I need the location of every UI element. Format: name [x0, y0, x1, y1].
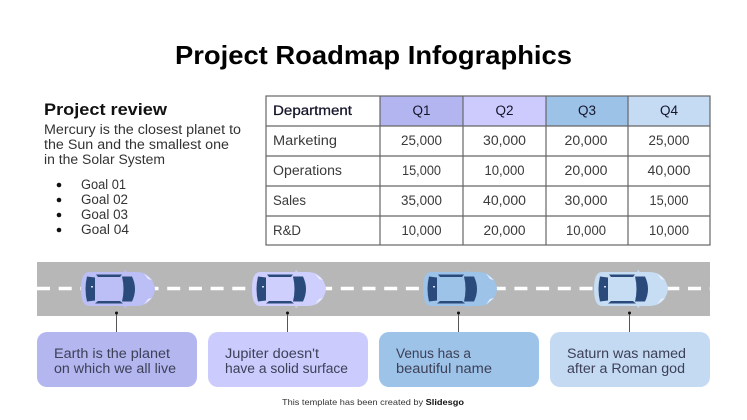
table: departments by quarter: 10,000	[566, 223, 606, 238]
table: departments by quarter: Operations	[273, 163, 342, 178]
table: departments by quarter: 25,000	[648, 133, 690, 148]
table: departments by quarter: 15,000	[402, 163, 441, 178]
card: Venus	[379, 332, 539, 387]
list: goals: Goal 02	[81, 192, 128, 207]
card: Jupiter: have a solid surface	[225, 361, 348, 376]
connector: car 1 to card 1	[115, 312, 118, 332]
icon: car 3	[423, 270, 497, 308]
list: goals	[57, 177, 129, 237]
table: departments by quarter: 20,000	[564, 133, 608, 148]
icon: car 2	[252, 270, 326, 308]
table: departments by quarter: 30,000	[483, 133, 526, 148]
card: Earth	[37, 332, 197, 387]
list: goals: Goal 04	[81, 222, 129, 237]
card: Saturn: Saturn was named	[567, 346, 686, 361]
card: Earth: Earth is the planet	[54, 346, 170, 361]
connector: car 3 to card 3	[457, 312, 460, 332]
table: departments by quarter: R&D	[273, 223, 301, 238]
table: departments by quarter: 15,000	[650, 193, 688, 208]
list: goals: Goal 01	[81, 177, 126, 192]
table: departments by quarter: 25,000	[401, 133, 442, 148]
connector: car 4 to card 4	[628, 312, 631, 332]
table: departments by quarter: Q2	[495, 103, 514, 118]
table: departments by quarter	[266, 96, 710, 245]
table: departments by quarter: Q3	[578, 103, 596, 118]
title: Project Roadmap Infographics	[175, 40, 572, 70]
card: Venus: Venus has a	[396, 346, 471, 361]
text block: description: in the Solar System	[44, 152, 165, 167]
connector: car 2 to card 2	[286, 312, 289, 332]
table: departments by quarter: 40,000	[648, 163, 690, 178]
text block: description: the Sun and the smallest one	[44, 137, 229, 152]
table: departments by quarter: 20,000	[484, 223, 526, 238]
text block: description	[44, 122, 241, 167]
card: Saturn: after a Roman god	[567, 361, 685, 376]
table: departments by quarter: 10,000	[484, 163, 524, 178]
table: departments by quarter: Department	[273, 103, 352, 118]
table: departments by quarter: Sales	[273, 193, 306, 208]
card: Earth: on which we all live	[54, 361, 176, 376]
table: departments by quarter: 10,000	[649, 223, 689, 238]
card: Venus: beautiful name	[396, 361, 492, 376]
table: departments by quarter: Q1	[412, 103, 431, 118]
icon: car 1	[81, 270, 155, 308]
footer credit: This template has been created by Slidesgo	[282, 397, 464, 407]
heading: project review: Project review	[44, 100, 168, 119]
table: departments by quarter: 30,000	[564, 193, 608, 208]
table: departments by quarter: 35,000	[401, 193, 442, 208]
panel: project review	[44, 100, 241, 237]
card: Jupiter: Jupiter doesn't	[225, 346, 319, 361]
table: departments by quarter: Marketing	[273, 133, 337, 148]
text block: description: Mercury is the closest planet to	[44, 122, 241, 137]
table: departments by quarter: 40,000	[483, 193, 526, 208]
card: Saturn	[550, 332, 710, 387]
table: departments by quarter: Q4	[660, 103, 678, 118]
card: Jupiter	[208, 332, 368, 387]
road	[37, 262, 710, 316]
list: goals: Goal 03	[81, 207, 128, 222]
table: departments by quarter: 20,000	[564, 163, 608, 178]
table: departments by quarter: 10,000	[402, 223, 442, 238]
icon: car 4	[594, 270, 668, 308]
